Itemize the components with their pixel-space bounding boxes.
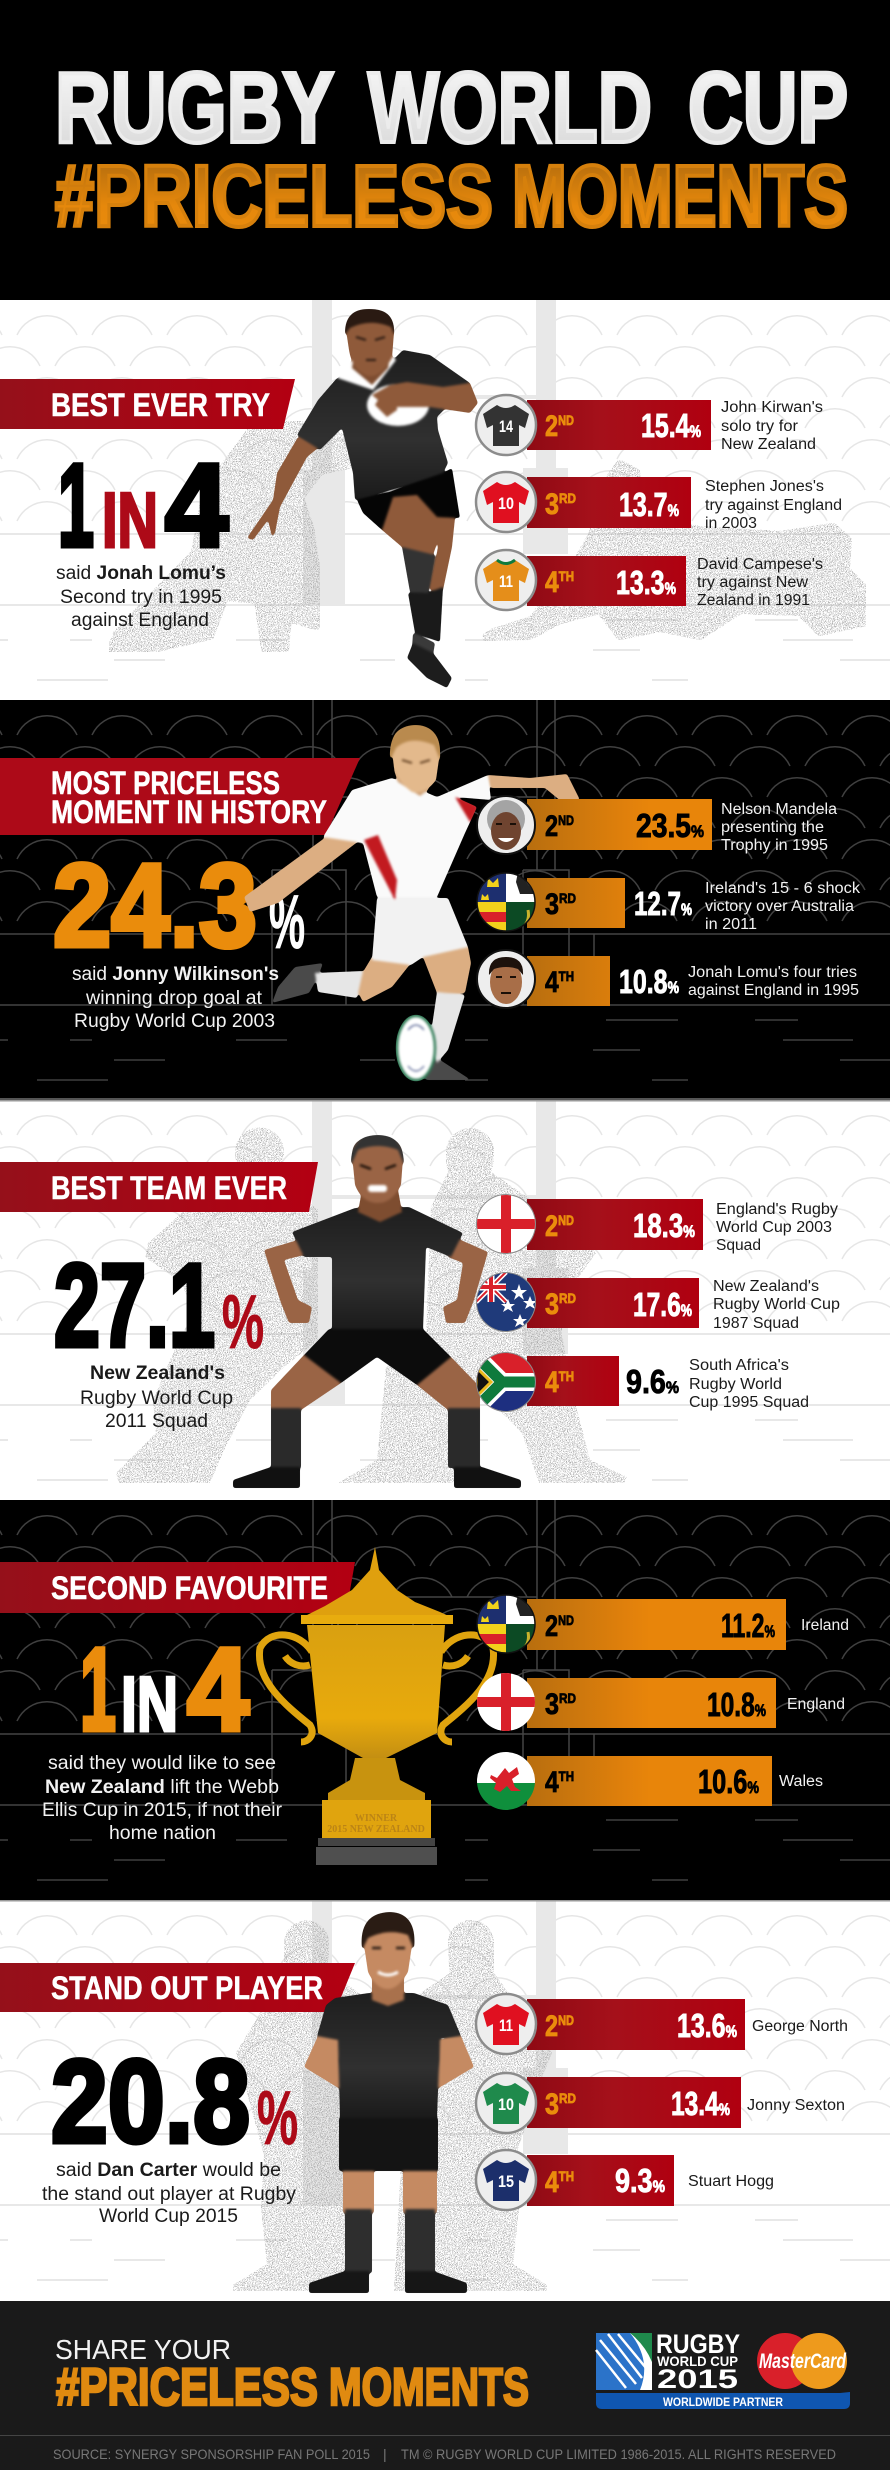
row: 3rd England 10.8% bbox=[476, 1672, 845, 1732]
label bbox=[689, 1357, 809, 1411]
player: Jonah Lomu bbox=[247, 309, 478, 688]
title: #Priceless Moments: #PRICELESS bbox=[55, 148, 493, 245]
bar: TH bbox=[559, 968, 574, 984]
heading banner: SECOND FAVOURITE bbox=[51, 1570, 328, 1606]
bar: TH bbox=[559, 1368, 574, 1384]
label: David Campese's bbox=[697, 556, 823, 573]
stat: 1 in 4: 4 bbox=[165, 440, 228, 572]
bar: 2 bbox=[545, 810, 562, 843]
bar: RD bbox=[559, 2090, 576, 2106]
bar: 10.6% bbox=[698, 1763, 759, 1800]
bar: 13.7% bbox=[619, 486, 679, 523]
caption bbox=[72, 964, 279, 1032]
share your text: SHARE YOUR bbox=[55, 2334, 231, 2365]
label bbox=[697, 556, 823, 609]
logo: MasterCard bbox=[757, 2333, 847, 2389]
icon: New Zealand flag bbox=[476, 1272, 537, 1332]
bar: RD bbox=[559, 490, 576, 506]
bar: 13.4% bbox=[671, 2085, 730, 2122]
bar: TH bbox=[559, 568, 574, 584]
caption: said Jonny Wilkinson's bbox=[72, 964, 279, 985]
label: Ireland's 15 - 6 shock bbox=[705, 880, 860, 897]
label: Rugby World bbox=[689, 1376, 782, 1393]
bar: RD bbox=[559, 1290, 576, 1306]
label: try against England bbox=[705, 497, 842, 514]
bar: 2 bbox=[545, 1210, 562, 1243]
row: 3rd Stephen Jones 13.7% bbox=[476, 472, 842, 532]
bar bbox=[527, 1678, 776, 1728]
heading banner: BEST EVER TRY bbox=[51, 387, 270, 423]
label bbox=[705, 478, 842, 532]
bar: 13.3% bbox=[616, 564, 676, 601]
icon: jersey 11 bbox=[476, 1994, 536, 2054]
source line: TM © RUGBY WORLD CUP LIMITED 1986-2015. ALL RIGHTS RESERVED bbox=[401, 2446, 836, 2462]
icon: rugby ball bbox=[397, 1016, 435, 1080]
heading banner: BEST TEAM EVER bbox=[51, 1170, 287, 1206]
logo: MasterCard: MasterCard bbox=[759, 2350, 847, 2373]
label: Jonah Lomu's four tries bbox=[688, 964, 857, 981]
bar: 4 bbox=[545, 1766, 562, 1799]
hashtag bbox=[56, 2358, 529, 2417]
label: Nelson Mandela bbox=[721, 801, 837, 818]
bar: ND bbox=[558, 1212, 574, 1228]
label: Wales bbox=[779, 1773, 823, 1790]
bar: 4 bbox=[545, 566, 562, 599]
icon: jersey 11: 11 bbox=[499, 572, 513, 591]
bar: 2 bbox=[545, 410, 562, 443]
header panel bbox=[0, 0, 890, 300]
icon: jersey 15 bbox=[476, 2150, 536, 2210]
row: 2nd England 2003 18.3% bbox=[476, 1194, 838, 1254]
bar: 23.5% bbox=[636, 807, 704, 844]
bar: 9.3% bbox=[615, 2162, 665, 2199]
caption: winning drop goal at bbox=[85, 988, 263, 1009]
bar bbox=[527, 1999, 745, 2050]
icon: Webb Ellis trophy: WINNER bbox=[355, 1813, 398, 1824]
icon: Wales flag bbox=[476, 1751, 536, 1811]
bar: 3 bbox=[545, 2088, 562, 2121]
bar bbox=[527, 1278, 699, 1328]
silhouette team mates bbox=[116, 1128, 627, 1483]
label: Rugby World Cup bbox=[713, 1296, 840, 1313]
bar: ND bbox=[558, 2012, 574, 2028]
caption: 2011 Squad bbox=[105, 1411, 208, 1432]
caption: Ellis Cup in 2015, if not their bbox=[42, 1800, 283, 1821]
caption: Second try in 1995 bbox=[60, 587, 222, 608]
bar: 13.6% bbox=[677, 2007, 737, 2044]
row: 4th Wales 10.6% bbox=[476, 1751, 823, 1811]
stat: 1 in 4 bbox=[58, 440, 228, 572]
silhouette team mates bbox=[233, 1920, 552, 2291]
icon: jersey 14 bbox=[476, 395, 536, 455]
bar bbox=[527, 878, 692, 928]
caption: said Jonah Lomu’s bbox=[56, 563, 226, 584]
hashtag: #PRICELESS bbox=[56, 2358, 318, 2417]
icon: Webb Ellis trophy: 2015 NEW ZEALAND bbox=[327, 1824, 425, 1835]
bar bbox=[527, 956, 679, 1006]
label bbox=[721, 801, 837, 854]
stat: 24.3%: % bbox=[269, 880, 305, 965]
footer panel bbox=[0, 2301, 890, 2470]
player: Dan Carter bbox=[304, 1912, 474, 2293]
label bbox=[721, 399, 823, 453]
caption: said they would like to see bbox=[48, 1753, 276, 1774]
bar: 2 bbox=[545, 2010, 562, 2043]
bar: 4 bbox=[545, 966, 562, 999]
panel: stand out player bbox=[0, 1900, 890, 2301]
bar bbox=[527, 1756, 772, 1806]
stat: 27.1%: 27.1 bbox=[54, 1240, 215, 1372]
row: 4th South Africa 1995 9.6% bbox=[476, 1352, 809, 1412]
icon: England flag bbox=[476, 1194, 536, 1254]
stat: 1 in 4 bbox=[80, 1624, 249, 1756]
row: 4th Jonah Lomu four tries 10.8% bbox=[477, 950, 859, 1008]
label bbox=[705, 880, 860, 933]
logo: Rugby World Cup 2015: WORLD CUP bbox=[657, 2353, 738, 2369]
stat: 1 in 4: IN bbox=[102, 476, 158, 564]
label: Cup 1995 Squad bbox=[689, 1394, 809, 1411]
bar: ND bbox=[558, 412, 574, 428]
bar bbox=[527, 1356, 679, 1406]
label: in 2011 bbox=[705, 916, 757, 933]
icon: jersey 10 bbox=[476, 472, 536, 532]
icon: Ireland flag bbox=[476, 872, 536, 932]
caption: New Zealand's bbox=[90, 1363, 225, 1384]
bar: 12.7% bbox=[634, 885, 692, 922]
logo: Rugby World Cup 2015: 2015 bbox=[657, 2364, 738, 2394]
label: England bbox=[787, 1696, 845, 1713]
icon: Ireland flag bbox=[476, 1594, 536, 1654]
caption: said Dan Carter would be bbox=[56, 2160, 281, 2181]
bar: ND bbox=[558, 812, 574, 828]
logo: Rugby World Cup 2015: RUGBY bbox=[656, 2329, 740, 2359]
caption: New Zealand lift the Webb bbox=[45, 1777, 279, 1798]
icon: jersey 11 bbox=[476, 550, 536, 610]
label: Jonny Sexton bbox=[747, 2097, 845, 2114]
icon: jersey 10: 10 bbox=[498, 2095, 514, 2114]
title: Rugby World Cup bbox=[55, 52, 848, 164]
bar: TH bbox=[559, 2168, 574, 2184]
bar: 4 bbox=[545, 2166, 562, 2199]
title: Rugby World Cup: WORLD bbox=[368, 52, 652, 164]
label: try against New bbox=[697, 574, 809, 591]
title: Rugby World Cup: RUGBY bbox=[55, 52, 334, 164]
bar: TH bbox=[559, 1768, 574, 1784]
source line: | bbox=[383, 2446, 387, 2462]
label: victory over Australia bbox=[705, 898, 854, 915]
caption bbox=[80, 1363, 233, 1432]
caption: Rugby World Cup 2003 bbox=[74, 1011, 275, 1032]
stat: 24.3%: 24.3 bbox=[53, 840, 257, 972]
bar bbox=[527, 2155, 674, 2206]
silhouette players bbox=[109, 421, 866, 652]
player: Jonny Wilkinson bbox=[244, 725, 580, 1080]
stat: 20.8%: % bbox=[257, 2076, 298, 2161]
bar: 4 bbox=[545, 1366, 562, 1399]
bar: 15.4% bbox=[641, 407, 701, 444]
source line: SOURCE: SYNERGY SPONSORSHIP FAN POLL 2015 bbox=[53, 2446, 370, 2462]
label: World Cup 2003 bbox=[716, 1219, 832, 1236]
stat: 1 in 4: 4 bbox=[187, 1624, 249, 1756]
heading banner: MOMENT IN HISTORY bbox=[51, 794, 327, 830]
caption: home nation bbox=[109, 1823, 216, 1844]
bar: 3 bbox=[545, 488, 562, 521]
bar bbox=[527, 1599, 786, 1650]
icon: jersey 14: 14 bbox=[499, 417, 513, 436]
bar: 2 bbox=[545, 1610, 562, 1643]
icon: South Africa flag bbox=[476, 1352, 536, 1412]
caption bbox=[42, 2160, 297, 2227]
bar: ND bbox=[558, 1612, 574, 1628]
panel: most priceless moment bbox=[0, 700, 890, 1100]
label: New Zealand's bbox=[713, 1278, 819, 1295]
label: South Africa's bbox=[689, 1357, 789, 1374]
title: #Priceless Moments bbox=[55, 148, 848, 245]
label: New Zealand bbox=[721, 436, 816, 453]
heading banner bbox=[0, 1562, 355, 1613]
stat: 27.1%: % bbox=[222, 1280, 264, 1365]
row: 3rd Jonny Sexton 13.4% bbox=[476, 2073, 845, 2133]
stat: 20.8%: 20.8 bbox=[51, 2036, 250, 2168]
bar bbox=[527, 556, 686, 606]
bar: RD bbox=[559, 1690, 576, 1706]
label: Zealand in 1991 bbox=[697, 592, 810, 609]
icon: jersey 10 bbox=[476, 2073, 536, 2133]
bar bbox=[527, 2077, 741, 2128]
stat: 1 in 4: 1 bbox=[80, 1624, 116, 1756]
bar: 17.6% bbox=[633, 1286, 692, 1323]
bar: 9.6% bbox=[626, 1363, 679, 1400]
label: Stephen Jones's bbox=[705, 478, 824, 495]
icon: jersey 11: 11 bbox=[499, 2016, 513, 2035]
icon: Lomu face bbox=[477, 950, 535, 1008]
logo: Rugby World Cup 2015: WORLDWIDE PARTNER bbox=[663, 2397, 784, 2409]
label: in 2003 bbox=[705, 515, 757, 532]
panel: best ever try bbox=[0, 300, 890, 700]
row: 4th Stuart Hogg 9.3% bbox=[476, 2150, 774, 2210]
label: 1987 Squad bbox=[713, 1315, 799, 1332]
label: George North bbox=[752, 2018, 848, 2035]
bar: RD bbox=[559, 890, 576, 906]
label: John Kirwan's bbox=[721, 399, 823, 416]
icon: Webb Ellis trophy bbox=[259, 1547, 494, 1865]
label: Trophy in 1995 bbox=[721, 837, 828, 854]
label: against England in 1995 bbox=[688, 982, 859, 999]
heading banner: STAND OUT PLAYER bbox=[51, 1970, 323, 2006]
label bbox=[713, 1278, 840, 1332]
stat: 1 in 4: 1 bbox=[58, 440, 94, 572]
heading banner bbox=[0, 1162, 318, 1212]
label: Squad bbox=[716, 1237, 761, 1254]
panel: second favourite bbox=[0, 1500, 890, 1900]
bar bbox=[527, 799, 712, 850]
label: Ireland bbox=[801, 1617, 849, 1634]
heading banner: MOST PRICELESS bbox=[51, 765, 280, 801]
caption: against England bbox=[71, 610, 209, 631]
heading banner bbox=[0, 1963, 355, 2012]
label bbox=[716, 1201, 838, 1254]
row: 2nd John Kirwan 15.4% bbox=[476, 395, 823, 455]
player: haka bbox=[233, 1135, 521, 1488]
caption: the stand out player at Rugby bbox=[42, 2184, 297, 2205]
label: Stuart Hogg bbox=[688, 2173, 774, 2190]
caption: Rugby World Cup bbox=[80, 1388, 233, 1409]
bar: 11.2% bbox=[721, 1607, 775, 1644]
caption bbox=[42, 1753, 283, 1844]
bar: 3 bbox=[545, 1688, 562, 1721]
icon: jersey 15: 15 bbox=[498, 2172, 514, 2191]
row: 3rd Ireland shock 12.7% bbox=[476, 872, 860, 933]
bar bbox=[527, 400, 711, 450]
bar: 18.3% bbox=[633, 1207, 695, 1244]
bar: 10.8% bbox=[619, 963, 679, 1000]
heading banner bbox=[0, 379, 295, 429]
label: presenting the bbox=[721, 819, 824, 836]
bar bbox=[527, 1199, 703, 1250]
icon: England flag bbox=[476, 1672, 536, 1732]
icon: Mandela face bbox=[477, 796, 535, 854]
label: solo try for bbox=[721, 418, 798, 435]
bar: 3 bbox=[545, 1288, 562, 1321]
source line bbox=[53, 2446, 836, 2462]
bar bbox=[527, 477, 691, 528]
icon: jersey 10: 10 bbox=[498, 494, 514, 513]
heading banner bbox=[0, 758, 360, 835]
label: England's Rugby bbox=[716, 1201, 838, 1218]
row: 3rd New Zealand 1987 17.6% bbox=[476, 1272, 840, 1332]
row: 2nd George North 13.6% bbox=[476, 1994, 848, 2054]
stat: 1 in 4: IN bbox=[121, 1660, 178, 1748]
hashtag: MOMENTS bbox=[329, 2358, 529, 2417]
row: 2nd Ireland 11.2% bbox=[476, 1594, 849, 1654]
panel: best team ever bbox=[0, 1100, 890, 1500]
caption: World Cup 2015 bbox=[99, 2206, 238, 2227]
bar: 10.8% bbox=[707, 1686, 766, 1723]
bar: 3 bbox=[545, 888, 562, 921]
caption bbox=[56, 563, 226, 631]
label bbox=[688, 964, 859, 999]
row: 4th David Campese 13.3% bbox=[476, 550, 823, 610]
logo: Rugby World Cup 2015 bbox=[596, 2329, 850, 2409]
row: 2nd Nelson Mandela 23.5% bbox=[477, 796, 837, 854]
